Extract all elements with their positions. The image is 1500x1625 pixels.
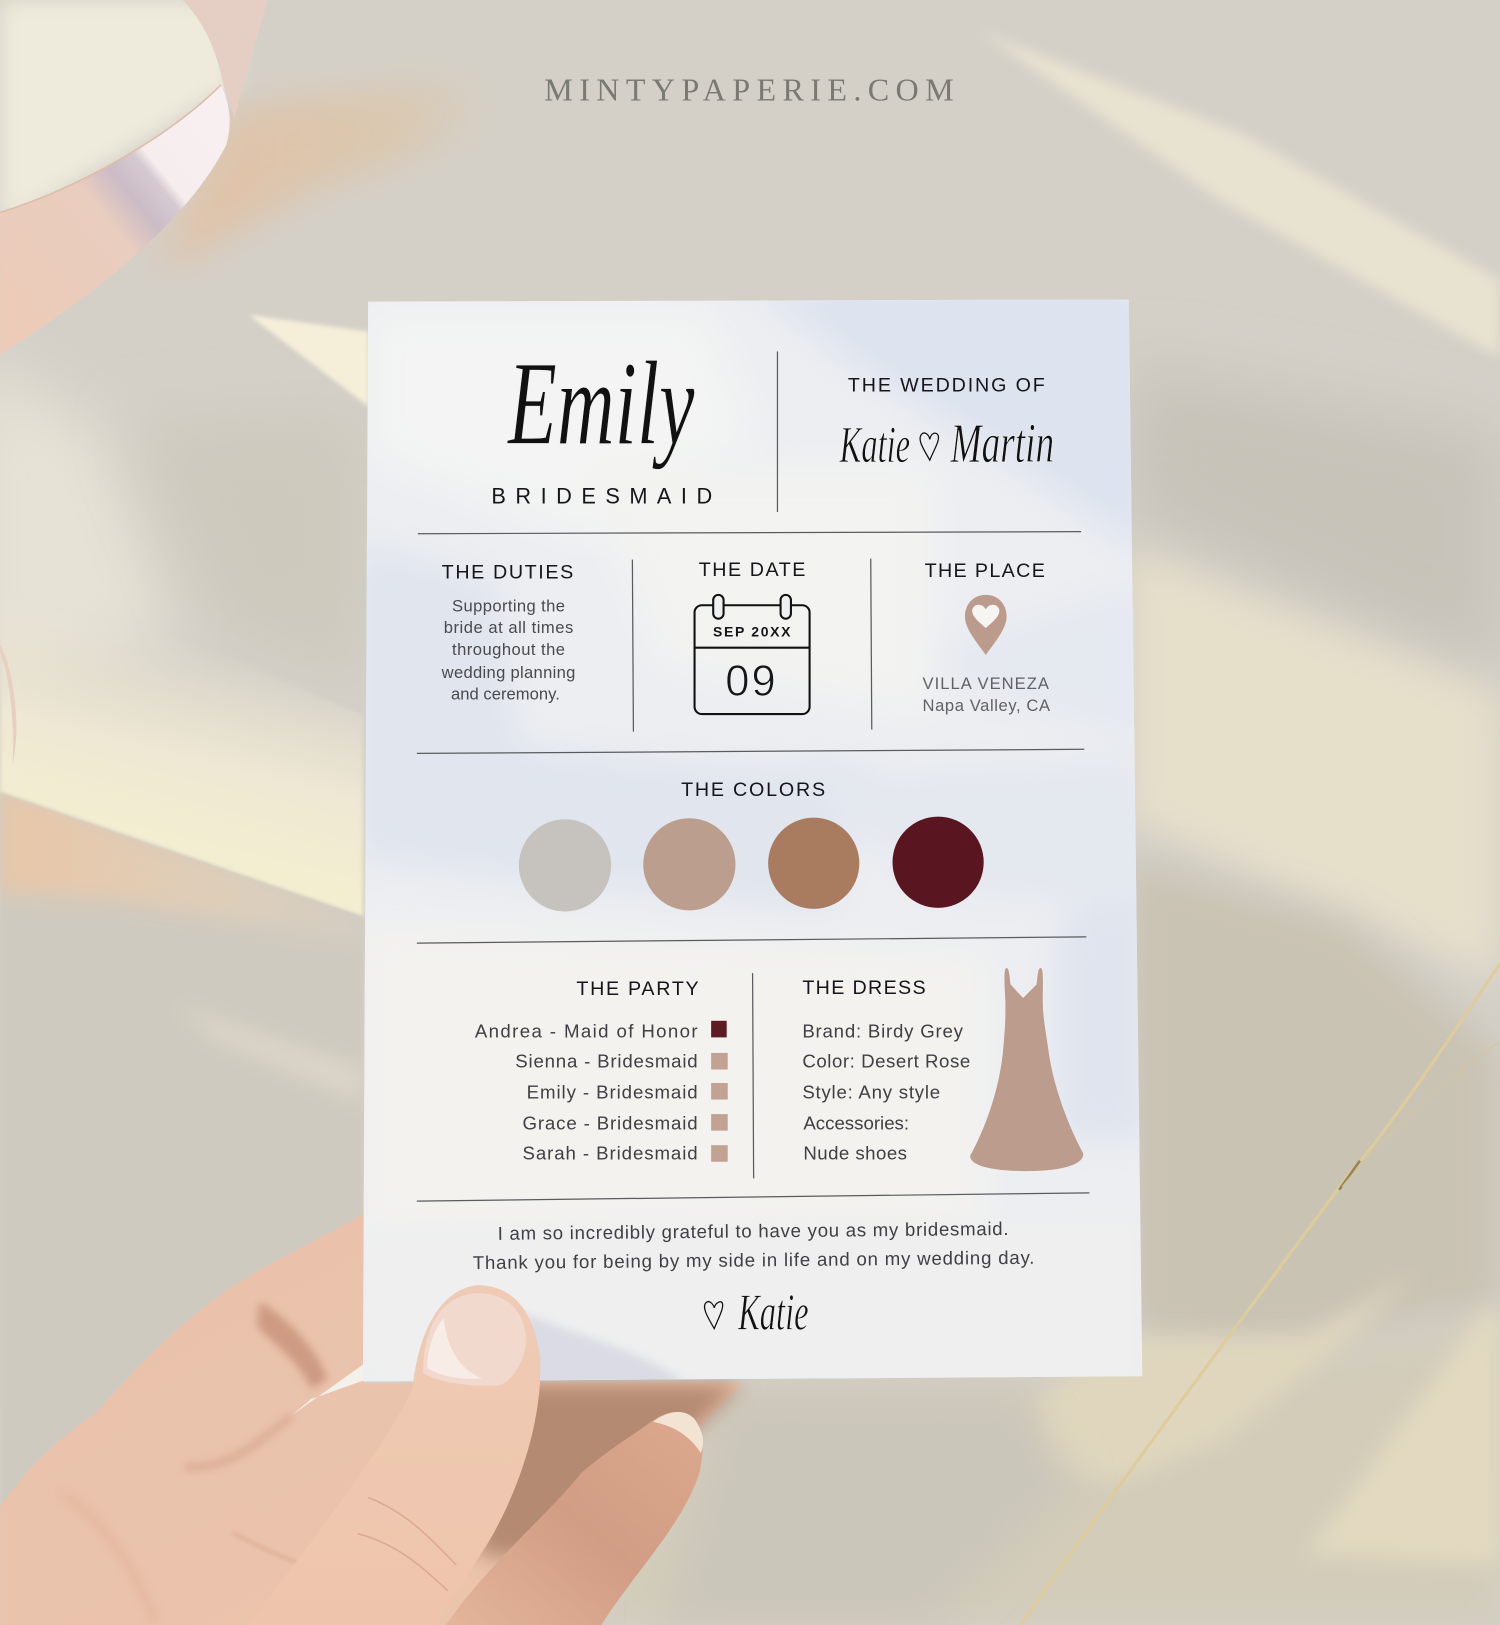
icon: calendar: SEP 20XX — [713, 623, 792, 639]
couple names: Martin — [950, 413, 1054, 475]
thank you message — [473, 1218, 1035, 1273]
panel: dress: THE DRESS — [802, 977, 926, 999]
panel: place: VILLA VENEZA — [923, 674, 1050, 693]
panel: duties — [441, 561, 575, 704]
panel: duties: bride at all times — [444, 618, 573, 637]
panel: place: THE PLACE — [925, 560, 1045, 582]
wedding heading: THE WEDDING OF — [848, 375, 1045, 397]
signature: Katie — [737, 1285, 809, 1342]
panel: dress: Nude shoes — [803, 1143, 907, 1164]
panel: duties: throughout the — [452, 640, 565, 659]
panel: party — [475, 978, 728, 1164]
color swatches — [519, 817, 984, 911]
website watermark: MINTYPAPERIE.COM — [544, 72, 954, 108]
panel: party: Sienna - Bridesmaid — [515, 1050, 698, 1071]
icon: dress — [970, 968, 1083, 1171]
panel: party: THE PARTY — [576, 978, 699, 1000]
panel: date — [695, 559, 810, 714]
role: BRIDESMAID — [491, 484, 712, 509]
panel: duties: Supporting the — [452, 596, 565, 615]
icon: location pin — [965, 595, 1007, 655]
panel: dress — [802, 968, 1083, 1171]
role colour keys — [711, 1021, 728, 1162]
hand: palm and rear fingers — [0, 1213, 742, 1625]
panel: dress: Brand: Birdy Grey — [802, 1020, 964, 1041]
thank you message: Thank you for being by my side in life and on my wedding day. — [473, 1247, 1035, 1273]
panel: party: Emily - Bridesmaid — [527, 1082, 698, 1103]
panel: colors — [519, 779, 984, 911]
panel: date: THE DATE — [699, 559, 805, 581]
name heading: Emily — [507, 338, 695, 471]
panel: dress: Style: Any style — [802, 1082, 940, 1103]
panel: place — [923, 560, 1051, 715]
panel: place: Napa Valley, CA — [923, 696, 1051, 715]
icon: calendar — [695, 595, 810, 714]
couple names — [839, 413, 1054, 475]
gold grass stalk — [1021, 964, 1500, 1625]
panel: party: Grace - Bridesmaid — [523, 1113, 698, 1134]
panel: party: Sarah - Bridesmaid — [523, 1143, 698, 1164]
panel: colors: THE COLORS — [681, 779, 825, 801]
ribbon — [0, 0, 268, 765]
panel: duties: THE DUTIES — [442, 561, 573, 583]
signature — [704, 1285, 809, 1342]
thank you message: I am so incredibly grateful to have you as my bridesmaid. — [498, 1218, 1009, 1244]
couple names: Katie — [839, 417, 910, 474]
panel: duties: wedding planning — [441, 663, 575, 682]
panel: duties: and ceremony. — [451, 685, 560, 704]
hand: thumb and finger over card — [249, 1285, 703, 1625]
icon: calendar: 09 — [725, 657, 778, 705]
panel: party: Andrea - Maid of Honor — [475, 1020, 698, 1041]
panel: dress: Color: Desert Rose — [802, 1050, 970, 1071]
panel: dress: Accessories: — [803, 1113, 909, 1134]
divider lines — [417, 351, 1089, 1201]
card — [353, 280, 1151, 1389]
